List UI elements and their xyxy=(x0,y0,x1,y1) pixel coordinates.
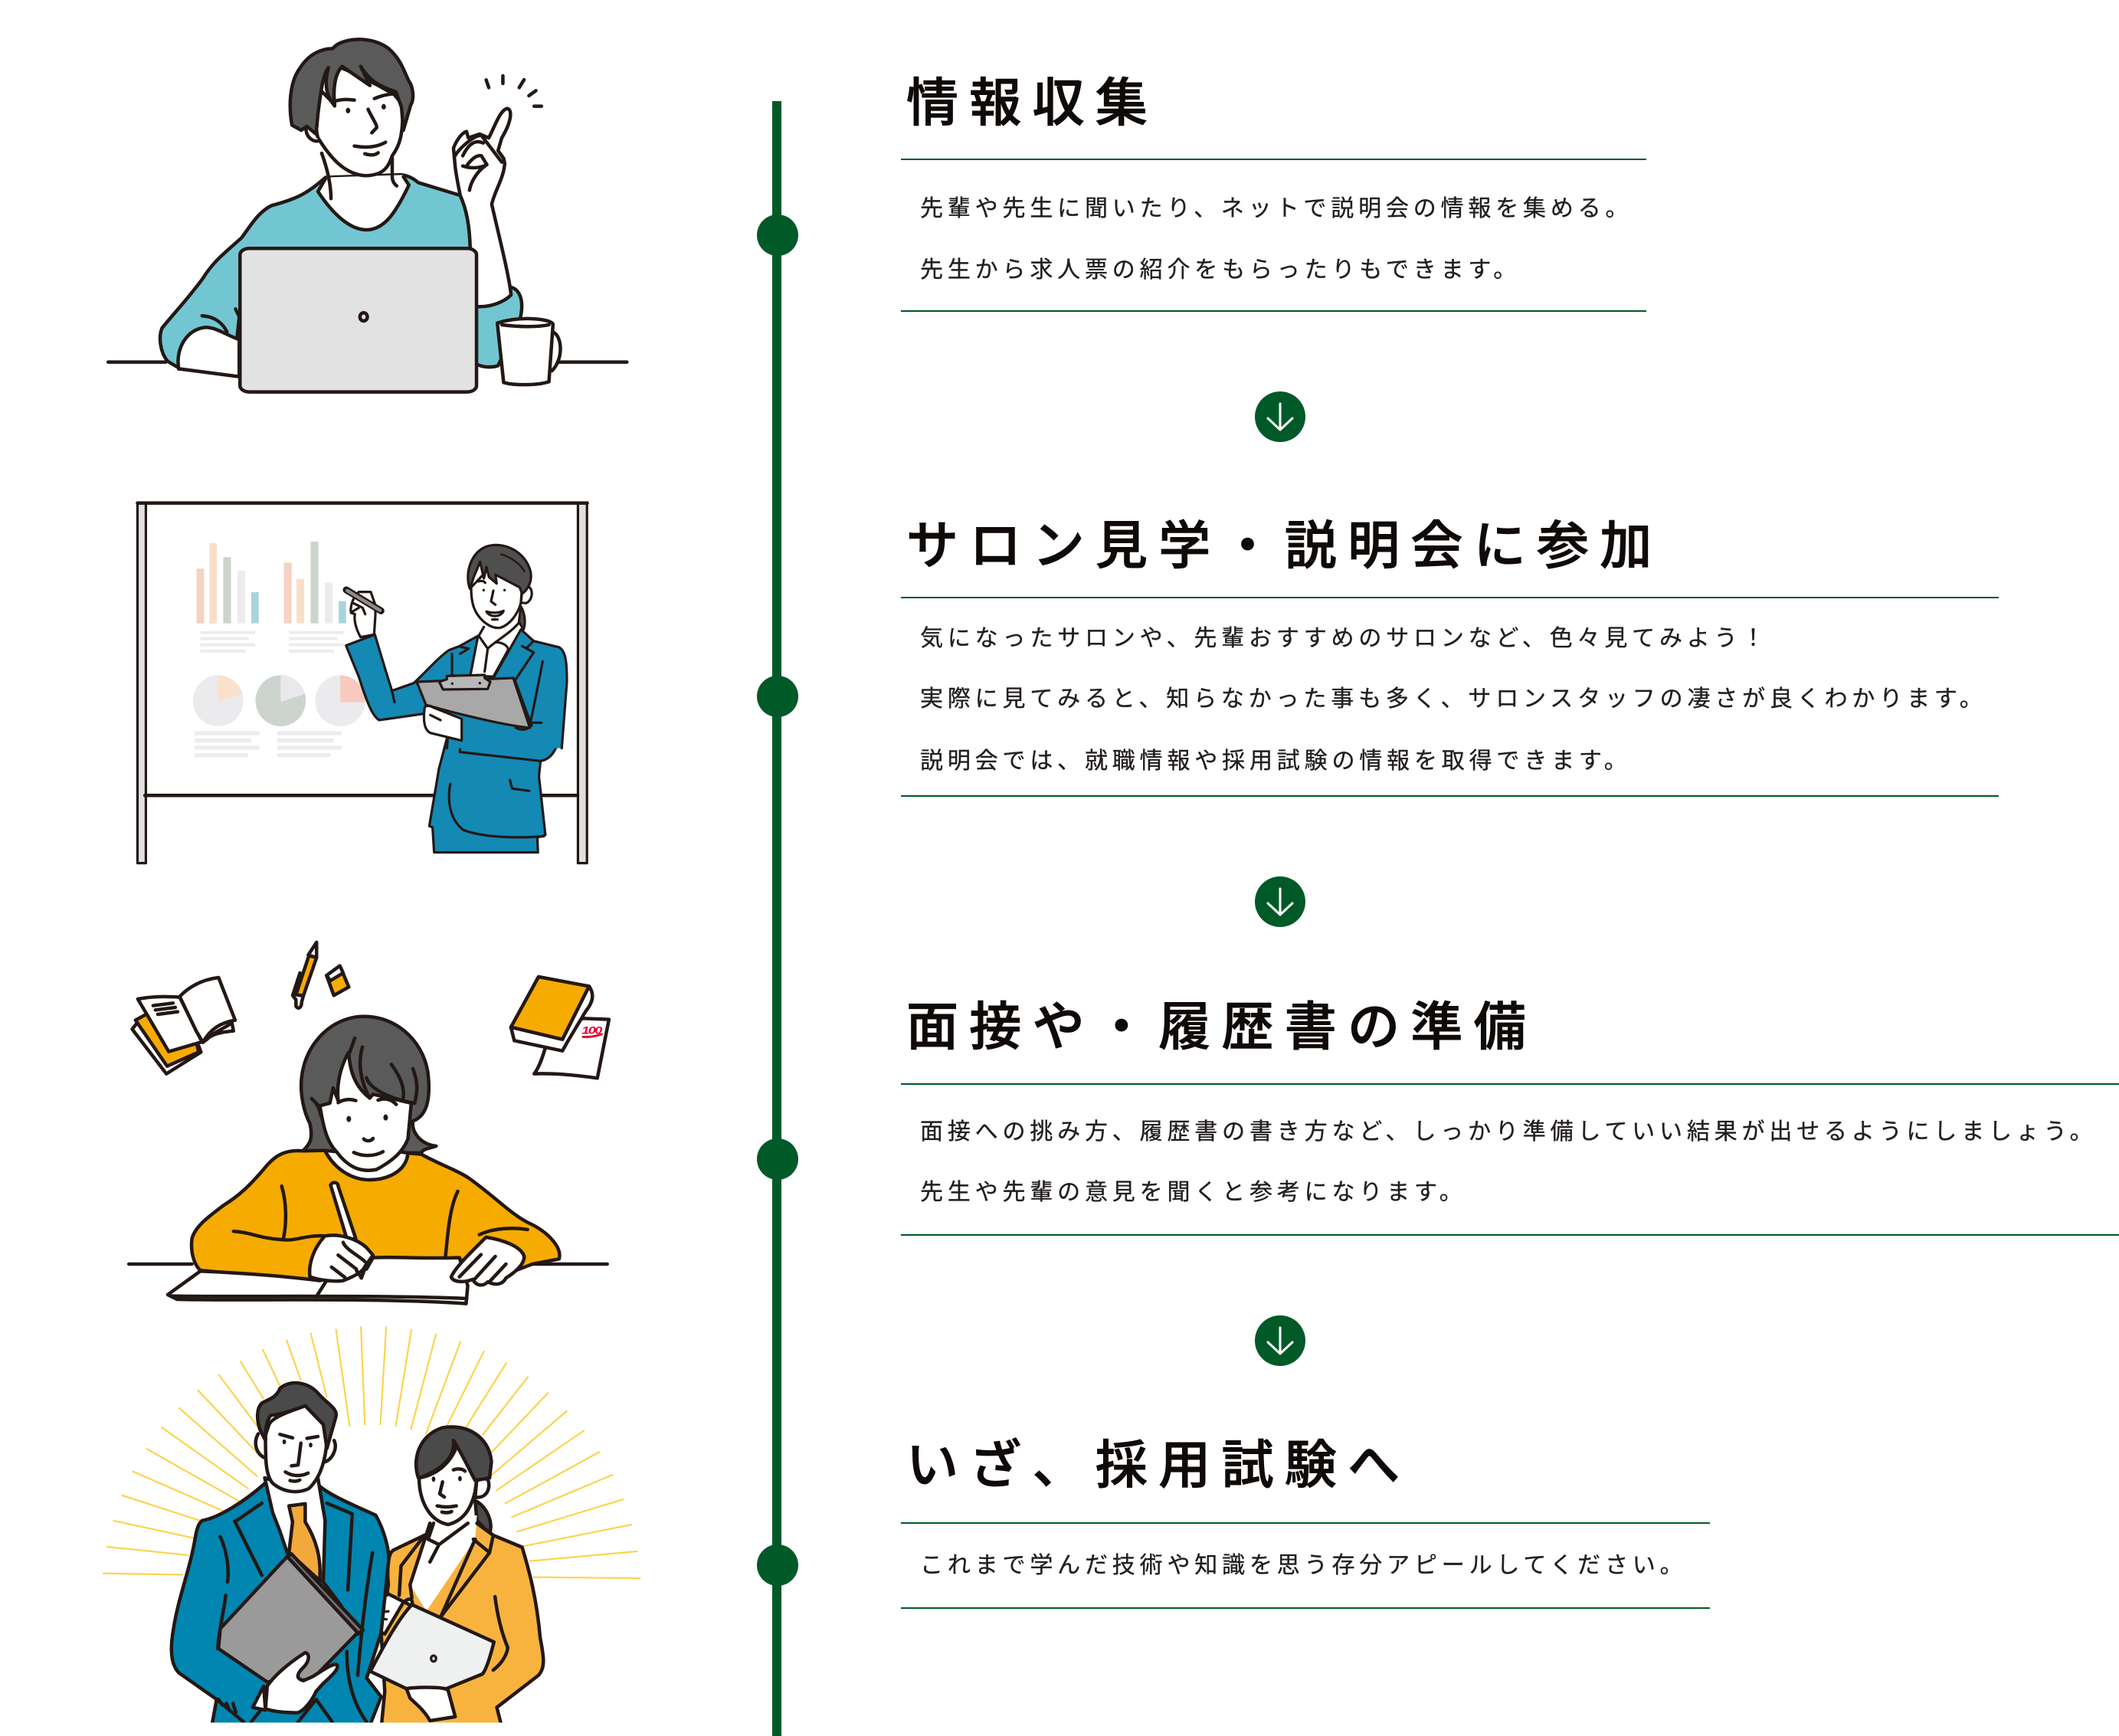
heading: step 4: いざ、採用試験へ xyxy=(906,1436,1410,1495)
floating open book xyxy=(133,978,235,1074)
heading: step 2: サロン見学・説明会に参加 xyxy=(906,517,1663,575)
woman figure xyxy=(370,1426,543,1729)
body text: step 2 line 3: 説明会では、就職情報や採用試験の情報を取得できます。 xyxy=(920,748,1632,774)
man figure xyxy=(172,1383,388,1729)
body text: step 2 line 2: 実際に見てみると、知らなかった事も多く、サロンスタッフの凄さが良くわかります。 xyxy=(920,686,1987,712)
body text: step 3 line 1: 面接への挑み方、履歴書の書き方など、しっかり準備していい結果が出せるようにしましょう。 xyxy=(920,1119,2098,1145)
hair back xyxy=(301,1017,436,1153)
illustration: woman studying at desk xyxy=(129,942,609,1304)
body text: step 3 line 2: 先生や先輩の意見を聞くと参考になります。 xyxy=(920,1180,1467,1205)
rule: step 3 top xyxy=(901,1083,2119,1085)
pencil and hand xyxy=(330,1183,355,1240)
presenter upper body xyxy=(346,545,567,748)
notebook xyxy=(168,1257,468,1304)
rule: step 1 top xyxy=(901,159,1646,160)
sunburst rays xyxy=(103,1326,640,1578)
body text: step 1 line 2: 先生から求人票の紹介をもらったりもできます。 xyxy=(920,257,1521,283)
arrow: step 1 to step 2 xyxy=(1255,391,1305,442)
rule: step 2 bottom xyxy=(901,795,1999,797)
body text: step 2 line 1: 気になったサロンや、先輩おすすめのサロンなど、色々見てみよう！ xyxy=(920,626,1769,651)
illustration: man with laptop pointing up xyxy=(108,39,627,392)
rule: step 2 top xyxy=(901,597,1999,598)
heading: step 1: 情報収集 xyxy=(906,74,1158,133)
heading: step 3: 面接や・履歴書の準備 xyxy=(906,998,1537,1056)
presenter lower body xyxy=(429,726,562,853)
floating book and test paper xyxy=(511,977,609,1078)
board chart: bars and pies xyxy=(193,542,365,757)
body text: step 4 line 1: これまで学んだ技術や知識を思う存分アピールしてください。 xyxy=(920,1553,1687,1578)
rule: step 4 top xyxy=(901,1522,1710,1524)
arrow: step 2 to step 3 xyxy=(1255,876,1305,927)
floating pencil and eraser xyxy=(293,942,349,1008)
rule: step 4 bottom xyxy=(901,1607,1710,1609)
timeline vertical line with step markers xyxy=(757,101,798,1736)
rule: step 1 bottom xyxy=(901,310,1646,312)
illustration: woman presenting at whiteboard xyxy=(137,503,588,863)
floating book and test paper: 100 xyxy=(581,1024,602,1037)
body text: step 1 line 1: 先輩や先生に聞いたり、ネットで説明会の情報を集める。 xyxy=(920,196,1633,221)
illustration: man and woman in suits with rays xyxy=(103,1326,640,1736)
arrow: step 3 to step 4 xyxy=(1255,1315,1305,1366)
rule: step 3 bottom xyxy=(901,1234,2119,1236)
